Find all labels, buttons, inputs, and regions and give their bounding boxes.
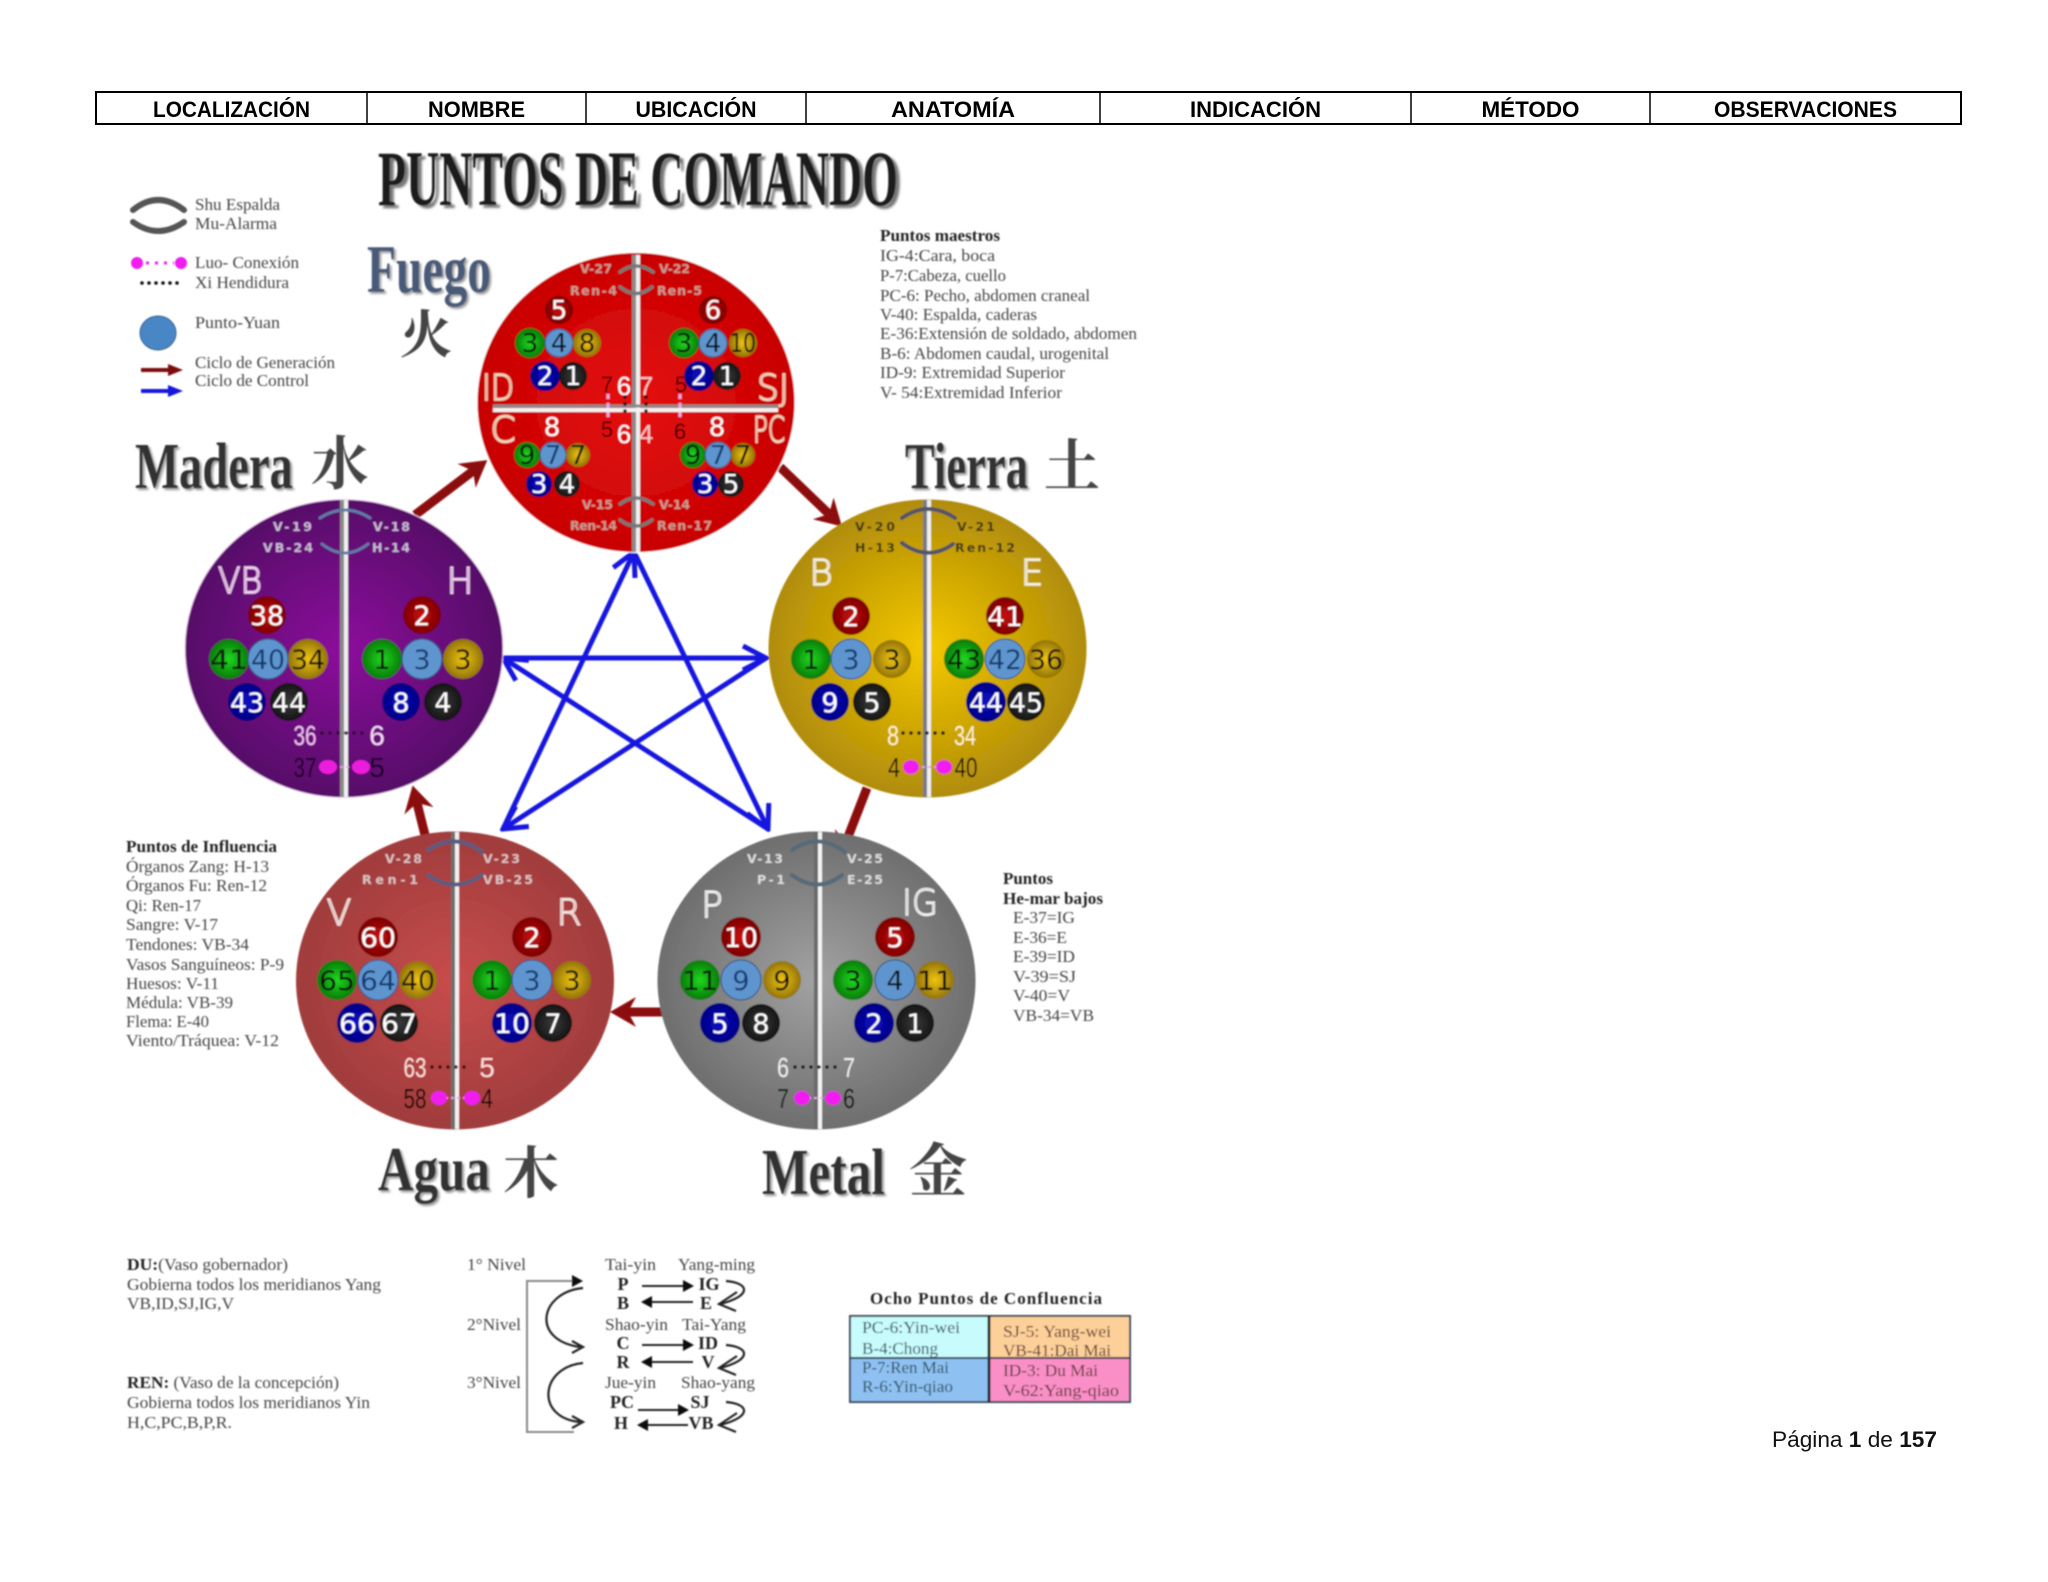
- center numbers: Fuego: 4: [639, 419, 653, 449]
- legend: [131, 195, 336, 397]
- table: Ocho Puntos de Confluencia: B-4:Chong: [862, 1339, 939, 1358]
- points: ID: 5: [551, 296, 567, 326]
- points: IG: 1: [906, 1009, 924, 1040]
- text block: Puntos He-mar bajos: E-37=IG: [1013, 908, 1075, 927]
- points: R: 3: [563, 966, 581, 997]
- diagram: niveles: Tai-yin: [605, 1255, 657, 1274]
- text block: Puntos maestros: B-6: Abdomen caudal, urogenital: [880, 344, 1109, 363]
- text block: Puntos He-mar bajos: V-40=V: [1013, 986, 1071, 1005]
- panel: Fuego circle: Ren-17: [657, 518, 712, 533]
- points: PC: 7: [735, 441, 751, 471]
- points: PC: [680, 413, 755, 500]
- legend: Ciclo de Generación: [195, 353, 336, 372]
- points: E: 36: [1029, 645, 1063, 676]
- points: B: 9: [821, 688, 839, 719]
- panel: Agua circle: VB-25: [483, 872, 533, 887]
- panel: Fuego circle: V-27: [580, 261, 612, 276]
- points: IG: 4: [886, 966, 904, 997]
- text block: Puntos maestros: V- 54:Extremidad Inferior: [880, 383, 1062, 402]
- panel: Tierra circle: B: [809, 553, 833, 594]
- panel: Fuego circle: C: [490, 410, 516, 451]
- element heading: Tierra: Tierra: [905, 430, 1028, 503]
- xi and luo points: Madera: 6: [369, 720, 385, 751]
- header table: [96, 92, 1961, 124]
- points: B: 3: [842, 645, 860, 676]
- points: ID: 3: [522, 329, 538, 359]
- points: VB: 40: [251, 645, 285, 676]
- xi and luo points: Madera: 36: [294, 720, 316, 751]
- text block: Puntos de Influencia: Tendones: VB-34: [126, 935, 250, 954]
- panel: Fuego circle: SJ: [757, 368, 789, 409]
- points: VB: [209, 596, 328, 721]
- text block: Puntos de Influencia: Huesos: V-11: [126, 974, 219, 993]
- points: E: 42: [988, 645, 1022, 676]
- diagram: niveles: Shao-yang: [681, 1373, 755, 1392]
- text block: Puntos maestros: [880, 226, 1137, 402]
- diagram: niveles: VB: [688, 1413, 714, 1433]
- panel: Metal circle: [658, 832, 976, 1130]
- points: ID: 8: [579, 329, 595, 359]
- points: PC: 3: [697, 470, 713, 500]
- text block: Puntos de Influencia: Flema: E-40: [126, 1012, 209, 1031]
- points: H: 1: [373, 645, 391, 676]
- points: IG: 3: [844, 966, 862, 997]
- points: SJ: 2: [691, 362, 707, 392]
- panel: Fuego circle: Ren-5: [657, 283, 702, 298]
- element heading: Metal: Metal: [762, 1136, 885, 1209]
- panel: Fuego circle: PC: [753, 410, 785, 451]
- panel: Madera circle: V-19: [273, 519, 312, 534]
- element heading: Metal: 金: [909, 1139, 967, 1204]
- element heading: Madera: Madera: [135, 430, 293, 503]
- element heading: Agua: 木: [503, 1144, 559, 1206]
- points: V: 60: [360, 923, 396, 954]
- diagram: niveles: PC: [610, 1392, 634, 1412]
- points: VB: 34: [291, 645, 325, 676]
- text block: Puntos He-mar bajos: He-mar bajos: [1003, 889, 1103, 908]
- panel: Fuego circle: Ren-4: [570, 283, 617, 298]
- panel: Tierra circle: E: [1021, 553, 1043, 594]
- table: Ocho Puntos de Confluencia: SJ-5: Yang-wei: [1003, 1322, 1111, 1341]
- points: H: 8: [392, 688, 410, 719]
- center numbers: Fuego: 7: [601, 372, 613, 397]
- points: H: [362, 596, 483, 721]
- points: H: 4: [434, 688, 452, 719]
- legend: Punto-Yuan: [195, 313, 281, 332]
- points: B: 3: [883, 645, 901, 676]
- panel: Agua circle: [296, 832, 614, 1130]
- points: PC: 7: [710, 441, 726, 471]
- text block: Puntos He-mar bajos: VB-34=VB: [1013, 1006, 1094, 1025]
- xi and luo points: Tierra: 4: [888, 752, 900, 783]
- text block: Puntos de Influencia: Sangre: V-17: [126, 915, 219, 934]
- panel: Metal circle: V-13: [747, 851, 783, 866]
- panel: Agua circle: V-23: [483, 851, 520, 866]
- text block: REN: REN: (Vaso de la concepción): [127, 1373, 339, 1392]
- xi and luo points: Agua: 5: [479, 1052, 495, 1083]
- xi and luo points: Tierra: 8: [887, 720, 899, 751]
- points: C: 9: [519, 441, 535, 471]
- xi and luo points: Agua: 63: [404, 1052, 426, 1083]
- center numbers: Fuego: 6: [617, 419, 631, 449]
- panel: Agua circle: V: [327, 893, 351, 934]
- diagram: niveles: Jue-yin: [605, 1373, 657, 1392]
- text block: Puntos He-mar bajos: Puntos: [1003, 869, 1053, 888]
- page number: Página 1 de 157: [1772, 1427, 1937, 1452]
- panel: Madera circle: H-14: [372, 540, 410, 555]
- points: IG: 2: [865, 1009, 883, 1040]
- points: IG: [833, 917, 954, 1043]
- text block: Puntos maestros: P-7:Cabeza, cuello: [880, 266, 1006, 285]
- center numbers: Fuego: 7: [639, 371, 653, 401]
- points: E: 41: [987, 602, 1023, 633]
- points: VB: 38: [250, 601, 284, 632]
- points: P: 8: [752, 1009, 770, 1040]
- panel: Metal circle: E-25: [847, 872, 883, 887]
- generation cycle arrows: [415, 467, 867, 1012]
- points: R: 10: [494, 1009, 530, 1040]
- points: P: 5: [711, 1009, 729, 1040]
- points: VB: 44: [272, 688, 306, 719]
- diagram: niveles: ID: [698, 1333, 718, 1353]
- diagram: niveles: [467, 1255, 756, 1433]
- header table: INDICACIÓN: [1190, 97, 1321, 122]
- points: R: 1: [483, 966, 501, 997]
- xi and luo points: Metal: 7: [777, 1083, 789, 1114]
- panel: Fuego circle: V-14: [659, 497, 690, 512]
- diagram: niveles: P: [618, 1274, 628, 1294]
- text block: Puntos de Influencia: Médula: VB-39: [126, 993, 233, 1012]
- panel: Madera circle: V-18: [373, 519, 410, 534]
- header table: OBSERVACIONES: [1714, 97, 1897, 122]
- points: V: 64: [360, 966, 396, 997]
- points: H: 2: [413, 601, 431, 632]
- xi and luo points: Metal: [777, 1052, 855, 1114]
- diagram: niveles: Tai-Yang: [682, 1315, 747, 1334]
- points: V: 66: [339, 1009, 375, 1040]
- title: PUNTOS DE COMANDO: [378, 135, 898, 222]
- xi and luo points: Agua: 4: [481, 1083, 493, 1114]
- text block: REN: H,C,PC,B,P,R.: [127, 1413, 232, 1432]
- points: ID: 1: [565, 362, 581, 392]
- points: ID: [515, 296, 601, 392]
- points: SJ: 3: [676, 329, 692, 359]
- text block: Puntos maestros: V-40: Espalda, caderas: [880, 305, 1037, 324]
- center numbers: Fuego: 6: [617, 371, 631, 401]
- table: Ocho Puntos de Confluencia: P-7:Ren Mai: [862, 1358, 949, 1377]
- points: SJ: 1: [719, 362, 735, 392]
- table: Ocho Puntos de Confluencia: ID-3: Du Mai: [1003, 1361, 1098, 1380]
- legend: Ciclo de Control: [195, 371, 309, 390]
- panel: Tierra circle: Ren-12: [955, 540, 1015, 555]
- points: C: 3: [531, 470, 547, 500]
- points: SJ: 4: [705, 329, 721, 359]
- text block: Puntos He-mar bajos: V-39=SJ: [1013, 967, 1076, 986]
- header table: LOCALIZACIÓN: [153, 97, 310, 122]
- header table: UBICACIÓN: [636, 97, 756, 122]
- element heading: Madera: 水: [311, 432, 369, 497]
- text block: DU: [127, 1255, 382, 1313]
- xi and luo points: Metal: 6: [843, 1083, 855, 1114]
- points: R: [472, 917, 591, 1043]
- points: R: 3: [523, 966, 541, 997]
- points: VB: 43: [230, 688, 264, 719]
- points: ID: 2: [537, 362, 553, 392]
- diagram: niveles: V: [702, 1352, 714, 1372]
- panel: Metal circle: P: [701, 885, 723, 926]
- points: E: 43: [947, 645, 981, 676]
- points: PC: 9: [685, 441, 701, 471]
- points: P: [680, 917, 801, 1043]
- table: Ocho Puntos de Confluencia: R-6:Yin-qiao: [862, 1377, 953, 1396]
- text block: REN: [127, 1373, 371, 1432]
- diagram: niveles: E: [700, 1293, 712, 1313]
- points: P: 11: [682, 966, 718, 997]
- panel: Madera circle: VB-24: [263, 540, 313, 555]
- xi and luo points: Tierra: 34: [954, 720, 976, 751]
- panel: Madera circle: [185, 500, 503, 798]
- panel: Tierra circle: V-20: [855, 519, 895, 534]
- points: B: 5: [863, 688, 881, 719]
- text block: Puntos He-mar bajos: E-36=E: [1013, 928, 1067, 947]
- header table: ANATOMÍA: [891, 97, 1015, 122]
- table: Ocho Puntos de Confluencia: VB-41:Dai Mai: [1003, 1341, 1111, 1360]
- points: V: [317, 917, 437, 1043]
- center numbers: Fuego: 5: [601, 417, 613, 442]
- table: Ocho Puntos de Confluencia: [850, 1289, 1130, 1402]
- header table: MÉTODO: [1482, 97, 1580, 122]
- points: R: 2: [523, 923, 541, 954]
- points: E: [944, 597, 1065, 722]
- table: Ocho Puntos de Confluencia: Ocho Puntos de Confluencia: [870, 1289, 1102, 1308]
- points: H: 3: [413, 645, 431, 676]
- panel: Fuego circle: V-22: [659, 261, 690, 276]
- points: ID: 4: [551, 329, 567, 359]
- legend: Mu-Alarma: [195, 214, 277, 233]
- diagram: niveles: 1° Nivel: [467, 1255, 526, 1274]
- diagram: niveles: IG: [698, 1274, 720, 1294]
- infographic image area: [126, 135, 1137, 1433]
- control cycle star arrows: [503, 552, 768, 829]
- points: VB: 41: [210, 645, 248, 676]
- xi and luo points: Agua: [404, 1052, 495, 1114]
- legend: Xi Hendidura: [195, 273, 289, 292]
- points: E: 45: [1009, 688, 1043, 719]
- panel: Agua circle: V-28: [385, 851, 422, 866]
- xi and luo points: Madera: [294, 720, 385, 783]
- center numbers: Fuego: 6: [674, 419, 686, 444]
- points: SJ: 6: [705, 296, 721, 326]
- xi and luo points: Tierra: [887, 720, 978, 783]
- text block: Puntos maestros: ID-9: Extremidad Superior: [880, 363, 1065, 382]
- table: Ocho Puntos de Confluencia: V-62:Yang-qiao: [1003, 1381, 1119, 1400]
- panel: Metal circle: IG: [902, 883, 938, 924]
- points: C: [514, 413, 590, 500]
- points: IG: 5: [886, 923, 904, 954]
- panel: Fuego circle: ID: [482, 368, 514, 409]
- points: E: 44: [969, 688, 1003, 719]
- points: C: 4: [559, 470, 575, 500]
- diagram: niveles: 2°Nivel: [467, 1315, 521, 1334]
- points: B: [791, 597, 911, 721]
- diagram: niveles: R: [616, 1352, 630, 1372]
- xi and luo points: Madera: 37: [294, 752, 316, 783]
- text block: Puntos de Influencia: Puntos de Influencia: [126, 837, 278, 856]
- element heading: Agua: Agua: [378, 1136, 490, 1204]
- text block: DU: DU:(Vaso gobernador): [127, 1255, 288, 1274]
- xi and luo points: Tierra: 40: [954, 752, 978, 783]
- panel: Tierra circle: H-13: [855, 540, 895, 555]
- points: PC: 8: [709, 413, 725, 443]
- diagram: niveles: C: [616, 1333, 630, 1353]
- header table: NOMBRE: [428, 97, 525, 122]
- text block: Puntos maestros: PC-6: Pecho, abdomen craneal: [880, 286, 1090, 305]
- element heading: Tierra: 土: [1044, 437, 1100, 499]
- points: P: 10: [724, 923, 758, 954]
- diagram: niveles: H: [614, 1413, 628, 1433]
- diagram: niveles: SJ: [690, 1392, 710, 1412]
- points: PC: 5: [723, 470, 739, 500]
- text block: REN: Gobierna todos los meridianos Yin: [127, 1393, 371, 1412]
- points: SJ: 10: [730, 329, 756, 359]
- xi and luo points: Agua: 58: [404, 1083, 426, 1114]
- points: R: 7: [544, 1009, 562, 1040]
- points: C: 7: [545, 441, 561, 471]
- text block: Puntos de Influencia: Órganos Fu: Ren-12: [126, 876, 267, 895]
- panel: Tierra circle: V-21: [957, 519, 995, 534]
- panel: Tierra circle: [768, 500, 1086, 798]
- diagram: niveles: B: [617, 1293, 629, 1313]
- text block: Puntos maestros: E-36:Extensión de soldado, abdomen: [880, 324, 1137, 343]
- panel: Metal circle: P-1: [757, 872, 785, 887]
- points: V: 65: [319, 966, 355, 997]
- element heading: Fuego: 火: [400, 308, 452, 365]
- text block: Puntos He-mar bajos: [1003, 869, 1103, 1025]
- points: P: 9: [773, 966, 791, 997]
- text block: Puntos de Influencia: [126, 837, 284, 1050]
- panel: Madera circle: H: [446, 561, 474, 602]
- xi and luo points: Madera: 5: [369, 752, 385, 783]
- panel: Madera circle: VB: [218, 561, 262, 602]
- text block: Puntos de Influencia: Órganos Zang: H-13: [126, 857, 269, 876]
- text block: Puntos de Influencia: Vasos Sanguíneos: P-9: [126, 955, 284, 974]
- diagram: niveles: Shao-yin: [605, 1315, 669, 1334]
- panel: Metal circle: V-25: [847, 851, 883, 866]
- panel: Fuego circle: V-15: [582, 497, 613, 512]
- points: V: 67: [381, 1009, 417, 1040]
- center numbers: Fuego: 5: [675, 372, 687, 397]
- points: C: 7: [570, 441, 586, 471]
- center numbers: Fuego: [601, 371, 687, 449]
- table: Ocho Puntos de Confluencia: PC-6:Yin-wei: [862, 1318, 960, 1337]
- text block: DU: Gobierna todos los meridianos Yang: [127, 1275, 382, 1294]
- element heading: Fuego: [367, 231, 491, 365]
- points: P: 9: [732, 966, 750, 997]
- points: C: 8: [544, 413, 560, 443]
- text block: Puntos maestros: Puntos maestros: [880, 226, 1000, 245]
- points: B: 2: [842, 602, 860, 633]
- element heading: Fuego: Fuego: [367, 231, 491, 307]
- points: B: 1: [802, 645, 820, 676]
- points: H: 3: [454, 645, 472, 676]
- legend: Shu Espalda: [195, 195, 280, 214]
- text block: Puntos de Influencia: Viento/Tráquea: V-12: [126, 1031, 279, 1050]
- diagram: niveles: Yang-ming: [678, 1255, 756, 1274]
- text block: Puntos maestros: IG-4:Cara, boca: [880, 246, 995, 265]
- xi and luo points: Metal: 7: [843, 1052, 855, 1083]
- legend: Luo- Conexión: [195, 253, 299, 272]
- panel: Fuego circle: [477, 252, 795, 552]
- text block: Puntos de Influencia: Qi: Ren-17: [126, 896, 201, 915]
- panel: Agua circle: Ren-1: [362, 872, 418, 887]
- text block: DU: VB,ID,SJ,IG,V: [127, 1294, 235, 1313]
- xi and luo points: Metal: 6: [777, 1052, 789, 1083]
- points: SJ: [669, 296, 757, 392]
- points: V: 40: [401, 966, 435, 997]
- panel: Fuego circle: Ren-14: [570, 518, 617, 533]
- diagram: niveles: 3°Nivel: [467, 1373, 521, 1392]
- panel: Agua circle: R: [556, 893, 582, 934]
- points: IG: 11: [917, 966, 953, 997]
- text block: Puntos He-mar bajos: E-39=ID: [1013, 947, 1075, 966]
